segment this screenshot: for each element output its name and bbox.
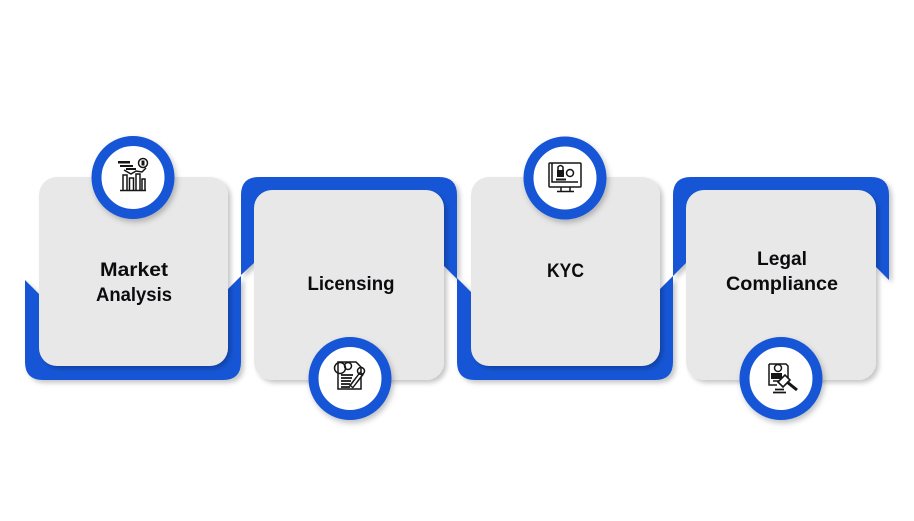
panel: market analysis [25,177,241,380]
heading: market analysis: Market [100,259,169,281]
card: kyc [471,177,660,366]
heading: market analysis: Analysis [96,284,172,306]
icon: market chart badge [96,141,170,214]
card: licensing [254,190,444,380]
blue frame: market analysis [25,276,241,380]
heading: legal compliance [726,248,838,295]
icon: legal gavel badge [744,342,818,415]
panel: licensing [241,177,457,380]
heading: kyc: KYC [547,260,584,282]
heading: legal compliance: Legal [757,248,807,270]
panel: legal compliance [673,177,889,380]
panel: kyc [457,177,673,380]
heading: legal compliance: Compliance [726,273,838,295]
card: market analysis [39,177,228,366]
heading: market analysis [96,259,172,306]
blue frame: kyc [457,276,673,380]
card: legal compliance [686,190,876,380]
blue frame: licensing [241,177,457,279]
blue frame: legal compliance [673,177,889,280]
icon: kyc monitor badge [528,142,602,214]
icon: licensing badge [314,342,386,415]
heading: licensing: Licensing [308,273,394,295]
